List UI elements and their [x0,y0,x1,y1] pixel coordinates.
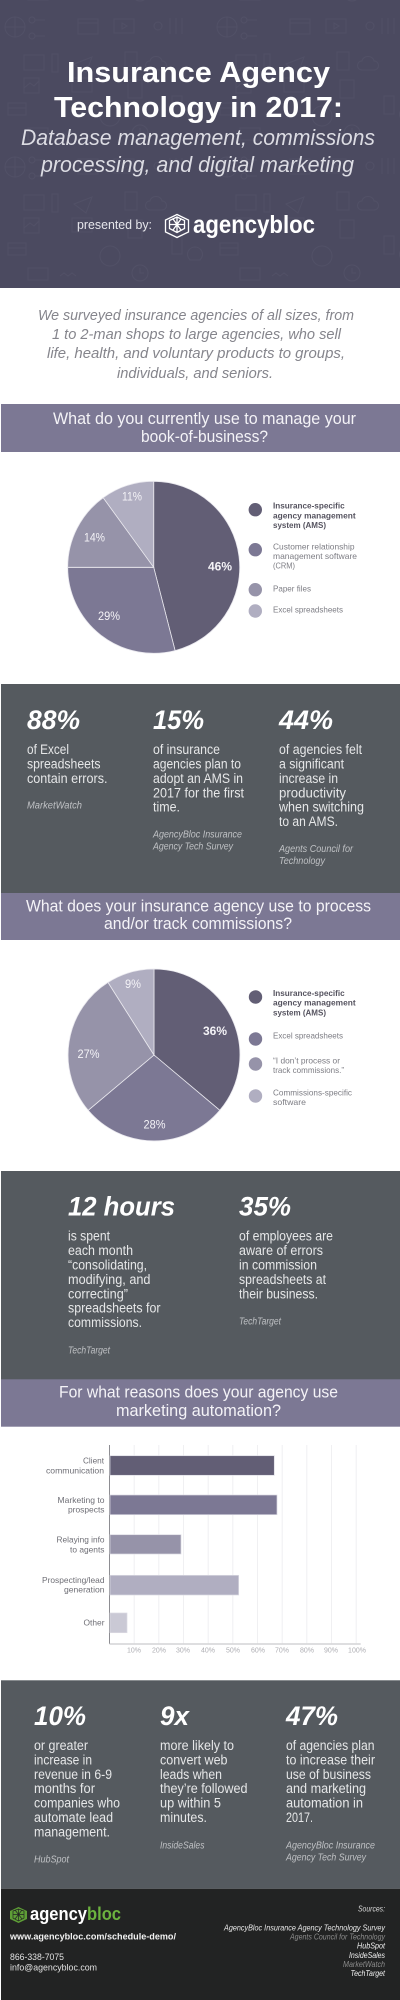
pie chart: commissions: 9% [125,977,141,991]
intro text [38,307,354,382]
axis ticks: 30% [176,1648,190,1655]
stat: 35%: TechTarget [239,1316,282,1327]
legend: book-of-business: Excel spreadsheets [273,604,343,614]
title: Technology in 2017: [54,92,343,124]
title: Insurance Agency [67,57,330,89]
pie chart: commissions: 27% [78,1047,100,1061]
pie chart: book-of-business: 11% [122,490,142,504]
sources: InsideSales [349,1951,385,1960]
bar chart: marketing automation [42,1445,366,1655]
legend: commissions: Commissions-specific [273,1087,353,1097]
stat: 15%: 15% [153,705,204,735]
stat: 9x [160,1701,248,1851]
stat: 44%: increase in [279,771,338,786]
category labels: generation [64,1585,105,1595]
stat: 47%: 47% [285,1701,338,1731]
pie chart: book-of-business: 46% [208,560,232,574]
stat: 10% [34,1701,120,1866]
stat: 12 hours: “consolidating, [68,1258,147,1272]
stat: 47%: Agency Tech Survey [285,1852,367,1863]
stat: 12 hours: is spent [68,1229,110,1244]
intro text: 1 to 2-man shops to large agencies, who sell [52,326,342,343]
stat: 9x: more likely to [160,1738,234,1753]
axis ticks: 90% [324,1648,338,1655]
subtitle: Database management, commissions [21,125,375,150]
category labels: Other [84,1618,105,1628]
stat: 9x: InsideSales [160,1840,204,1851]
stat: 12 hours: spreadsheets for [68,1301,161,1316]
pie chart: commissions: 28% [144,1117,166,1131]
legend: commissions: Excel spreadsheets [273,1030,343,1040]
subtitle: processing, and digital marketing [40,152,355,177]
category labels: Prospecting/lead [42,1575,105,1585]
sources: Sources: [358,1905,385,1914]
legend: commissions [249,988,356,1107]
stat: 10%: automate lead [34,1810,113,1825]
stat: 35%: of employees are [239,1229,333,1244]
footer logo: bloc [87,1903,121,1924]
axis ticks: 20% [152,1648,166,1655]
stat: 44% [278,705,364,867]
presented by: presented by: [77,217,152,232]
stat: 10%: HubSpot [34,1855,70,1866]
heading band: commissions: and/or track commissions? [104,914,292,933]
stat: 47% [285,1701,375,1863]
stat: 10%: months for [34,1781,95,1796]
stat: 12 hours: correcting” [68,1286,128,1301]
subtitle [21,125,375,177]
stats panel 3 [1,1680,400,1889]
heading band: book-of-business: What do you currently use to manage your [53,409,356,428]
stat: 9x: 9x [160,1701,190,1731]
axis ticks: 60% [251,1648,265,1655]
stat: 12 hours [68,1192,175,1356]
stat: 10%: management. [34,1824,110,1839]
legend: book-of-business: agency management [273,510,356,520]
legend: commissions: Insurance-specific [273,988,345,998]
bars [110,1456,277,1633]
stat: 9x: leads when [160,1767,222,1782]
stat: 9x: convert web [160,1752,228,1767]
contact [10,1952,97,1974]
stat: 12 hours: each month [68,1243,133,1258]
stat: 47%: to increase their [286,1752,375,1767]
stat: 15%: Agency Tech Survey [152,842,234,852]
stat: 35%: their business. [239,1286,318,1301]
stat: 35%: 35% [239,1192,291,1222]
stat: 15%: adopt an AMS in [153,771,243,786]
stat: 47%: and marketing [286,1781,366,1796]
legend: book-of-business: (CRM) [273,561,295,571]
stat: 44%: Technology [279,856,326,867]
sources: HubSpot [357,1942,386,1951]
heading band: commissions [1,893,400,940]
stat: 15%: AgencyBloc Insurance [152,829,242,840]
category labels: to agents [70,1544,104,1554]
stat: 35%: in commission [239,1258,317,1272]
stat: 88%: of Excel [27,742,69,757]
sources: TechTarget [350,1969,386,1978]
heading band: commissions: What does your insurance agency use to process [26,897,371,916]
pie chart: book-of-business: 14% [84,531,105,545]
stats panel 2 [1,1171,400,1380]
category labels: prospects [68,1505,104,1515]
legend: commissions: system (AMS) [273,1007,326,1017]
contact: 866-338-7075 [10,1952,64,1963]
axis ticks: 40% [201,1648,215,1655]
stat: 9x: they’re followed [160,1781,248,1796]
footer logo: agency [30,1903,88,1924]
sources: AgencyBloc Insurance Agency Technology Survey [223,1924,386,1933]
stat: 10%: increase in [34,1752,92,1767]
sources: MarketWatch [343,1960,385,1969]
stat: 15%: of insurance [153,742,220,757]
axis ticks: 70% [275,1648,289,1655]
pie chart: commissions: 36% [203,1024,227,1038]
stat: 10%: 10% [34,1701,86,1731]
axis ticks [127,1648,366,1655]
stat: 88%: spreadsheets [27,756,101,772]
stat: 12 hours: 12 hours [68,1192,175,1222]
legend: commissions: track commissions.” [273,1065,344,1075]
footer logo [10,1903,121,1924]
stat: 10%: revenue in 6-9 [34,1767,112,1782]
stat: 47%: 2017. [286,1810,313,1825]
contact: info@agencybloc.com [10,1963,97,1974]
stat: 47%: of agencies plan [286,1738,374,1753]
stat: 15%: time. [153,800,180,815]
stat: 44%: when switching [278,800,364,815]
legend: book-of-business: Customer relationship [273,541,355,551]
stat: 12 hours: TechTarget [68,1345,111,1356]
stat: 15%: agencies plan to [153,756,241,772]
stat: 47%: use of business [286,1767,371,1782]
title [54,57,343,124]
stat: 47%: AgencyBloc Insurance [285,1840,375,1851]
stat: 9x: minutes. [160,1810,207,1825]
legend: book-of-business: Insurance-specific [273,501,345,511]
stat: 88%: 88% [27,705,80,735]
legend: commissions: agency management [273,998,356,1008]
stats panel 1 [1,684,400,893]
heading band: book-of-business [1,404,400,452]
pie chart: commissions [68,969,240,1141]
stat: 88%: MarketWatch [27,801,82,812]
intro text: We surveyed insurance agencies of all sizes, from [38,307,354,324]
stat: 44%: productivity [279,785,346,800]
legend: book-of-business: Paper files [273,584,311,594]
intro text: life, health, and voluntary products to groups, [47,345,345,362]
stat: 44%: 44% [278,705,333,735]
legend: commissions: “I don’t process or [273,1055,340,1065]
stat: 35%: spreadsheets at [239,1272,326,1287]
legend: book-of-business [249,501,357,618]
stat: 12 hours: commissions. [68,1315,142,1330]
stat: 44%: a significant [279,756,344,772]
stat: 88%: contain errors. [27,771,108,786]
heading band: book-of-business: book-of-business? [141,427,268,446]
axis ticks: 50% [226,1648,240,1655]
stat: 44%: Agents Council for [278,844,354,855]
stat: 47%: automation in [286,1796,363,1811]
legend: book-of-business: management software [273,551,357,561]
legend: commissions: software [273,1097,306,1107]
pie chart: book-of-business: 29% [98,609,120,623]
heading band: marketing automation: For what reasons does your agency use [59,1382,338,1402]
intro text: individuals, and seniors. [117,365,273,382]
stat: 9x: up within 5 [160,1796,221,1811]
stat: 88% [27,705,108,812]
footer [1,1889,400,2000]
stat: 15%: 2017 for the first [153,785,244,800]
stat: 35%: aware of errors [239,1243,323,1258]
header panel [0,0,400,288]
stat: 44%: to an AMS. [279,814,338,829]
stat: 15% [152,705,244,852]
stat: 10%: companies who [34,1796,120,1811]
stat: 10%: or greater [34,1738,88,1753]
logo: agencybloc: agencybloc [193,211,315,239]
stat: 12 hours: modifying, and [68,1272,150,1287]
category labels: communication [46,1465,104,1475]
pie chart: book-of-business [68,481,240,653]
axis ticks: 10% [127,1648,141,1655]
stat: 44%: of agencies felt [279,742,362,757]
sources [223,1905,386,1978]
stat: 35% [239,1192,333,1327]
heading band: marketing automation [1,1379,400,1427]
axis ticks: 100% [348,1648,366,1655]
website: www.agencybloc.com/schedule-demo/ [9,1931,176,1942]
axis ticks: 80% [300,1648,314,1655]
heading band: marketing automation: marketing automation? [116,1401,281,1420]
category labels: Relaying info [56,1535,105,1545]
sources: Agents Council for Technology [289,1933,386,1942]
category labels [42,1456,105,1628]
category labels: Marketing to [58,1495,105,1505]
legend: book-of-business: system (AMS) [273,520,326,530]
category labels: Client [83,1456,105,1466]
